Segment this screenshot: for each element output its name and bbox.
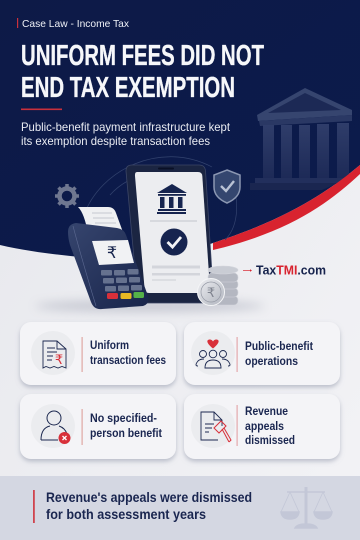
icon: check badge bbox=[160, 228, 188, 256]
icon: courthouse bbox=[250, 88, 352, 190]
title bbox=[21, 40, 264, 104]
title: END TAX EXEMPTION bbox=[21, 72, 235, 104]
subtitle: Public-benefit payment infrastructure kept bbox=[21, 120, 231, 134]
icon: document with gavel bbox=[201, 412, 231, 442]
conclusion band: for both assessment years bbox=[46, 506, 206, 522]
card: revenue appeals dismissed: appeals bbox=[245, 421, 284, 433]
red swoosh bbox=[213, 165, 360, 250]
orbit lines bbox=[84, 157, 237, 240]
icon: gear bbox=[55, 184, 79, 208]
icon: fee receipt: ₹ bbox=[55, 353, 63, 368]
icon: person with cross bbox=[41, 411, 70, 444]
card: no specified-person benefit bbox=[20, 394, 176, 459]
receipt bbox=[78, 207, 124, 235]
brand: TaxTMI.com: TaxTMI.com bbox=[256, 264, 326, 278]
coins: ₹ bbox=[207, 286, 215, 301]
icon: people with heart bbox=[196, 340, 230, 368]
subtitle bbox=[21, 120, 231, 148]
card: no specified-person benefit: No specified- bbox=[90, 413, 157, 425]
card: uniform transaction fees bbox=[20, 322, 176, 385]
tag line: Case Law - Income Tax bbox=[22, 18, 130, 30]
keypad bbox=[101, 269, 142, 292]
card: uniform transaction fees: Uniform bbox=[90, 340, 129, 352]
card: no specified-person benefit: person benefit bbox=[90, 428, 162, 440]
conclusion band bbox=[0, 476, 360, 540]
card: revenue appeals dismissed: dismissed bbox=[245, 435, 295, 447]
terminal screen: ₹ bbox=[107, 243, 117, 262]
title underline bbox=[21, 108, 62, 110]
card: revenue appeals dismissed: Revenue bbox=[245, 406, 288, 418]
conclusion band: Revenue's appeals were dismissed bbox=[46, 489, 252, 505]
icon: shield bbox=[214, 170, 240, 203]
icon: fee receipt bbox=[43, 341, 66, 368]
card: revenue appeals dismissed bbox=[184, 394, 340, 459]
subtitle: its exemption despite transaction fees bbox=[21, 134, 210, 148]
card: public-benefit operations: operations bbox=[245, 356, 298, 368]
shadow under devices bbox=[35, 300, 265, 312]
title: UNIFORM FEES DID NOT bbox=[21, 40, 264, 72]
coins bbox=[198, 266, 238, 306]
phone bbox=[126, 165, 214, 303]
icon: bank bbox=[157, 184, 187, 214]
card: uniform transaction fees: transaction fees bbox=[90, 355, 166, 367]
POS terminal bbox=[68, 223, 148, 309]
card: public-benefit operations: Public-benefit bbox=[245, 341, 313, 353]
icon: scales of justice bbox=[281, 487, 332, 528]
header navy background bbox=[0, 0, 360, 259]
card: public-benefit operations bbox=[184, 322, 340, 385]
